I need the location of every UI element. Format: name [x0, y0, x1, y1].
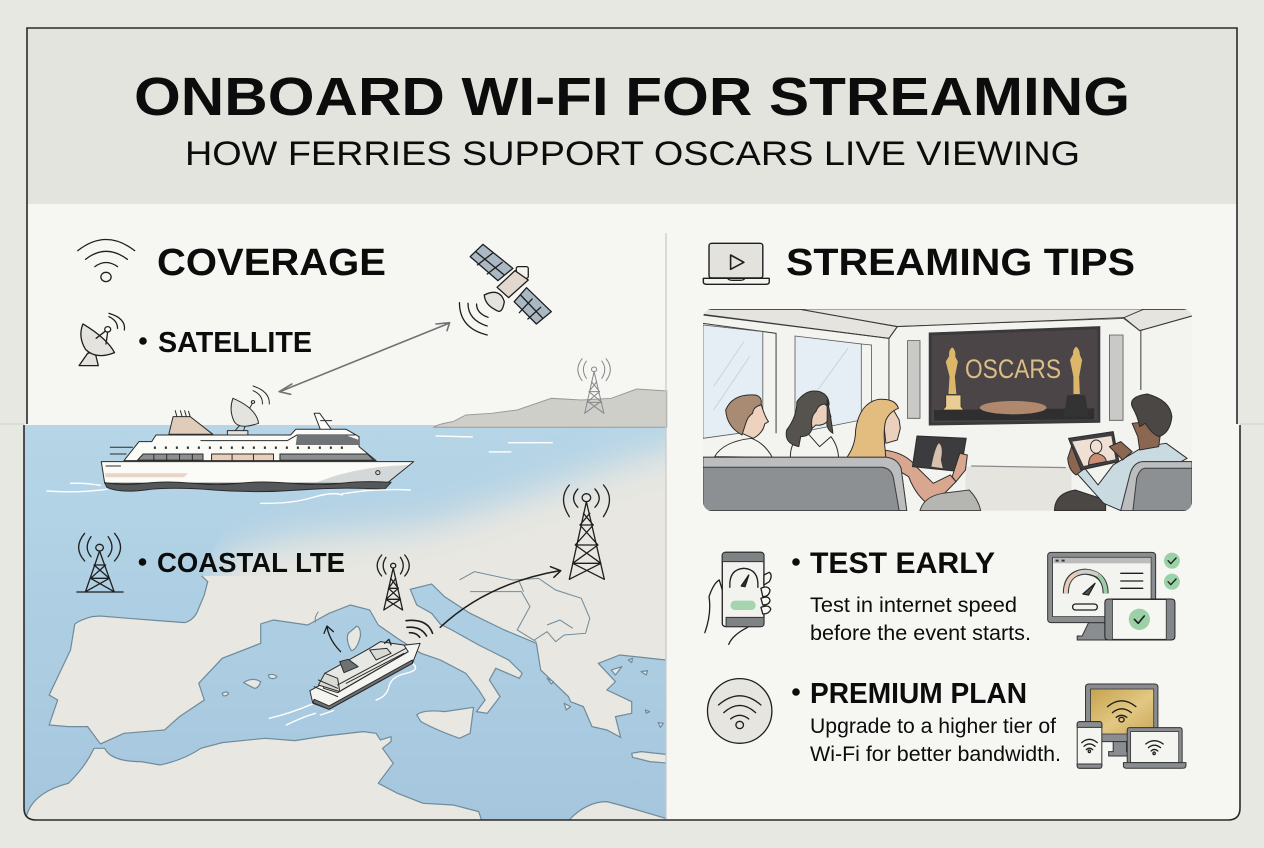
tip: premium plan: [708, 678, 1186, 768]
tip: premium plan: PREMIUM PLAN: [810, 678, 1027, 710]
solar panels: [470, 244, 551, 324]
satellite illustration: [459, 244, 551, 335]
text: test early detail: Test in internet speed: [810, 594, 1017, 617]
europe land soft fade: [204, 434, 666, 576]
divider between panels: [665, 233, 667, 820]
heading: coverage: [78, 239, 386, 284]
text: test early detail: [810, 594, 1031, 645]
text: premium plan detail: [810, 715, 1061, 766]
tablet: [912, 436, 966, 472]
seated man with tablet: [1054, 490, 1106, 511]
seated man: [715, 438, 772, 457]
icon: phone speed test: [705, 552, 771, 644]
map tower: small: [377, 555, 409, 610]
seat bench: [703, 457, 907, 511]
title: ONBOARD WI-FI FOR STREAMING: [134, 67, 1130, 127]
map tower: large: [564, 485, 609, 579]
balkan borders: [459, 572, 590, 642]
sicily: [417, 707, 474, 738]
greek islands: [547, 658, 671, 763]
corsica: [347, 626, 360, 651]
wall floor: [965, 467, 1072, 511]
speakers: [908, 341, 920, 418]
satellite item: SATELLITE: [158, 327, 312, 359]
arrow: ship to tower: [440, 567, 561, 627]
balearic islands: [222, 674, 277, 696]
heading: streaming tips: STREAMING TIPS: [786, 242, 1135, 284]
icon: lte tower: [77, 533, 123, 592]
screen text: oscars: OSCARS: [965, 354, 1061, 384]
statuette right: [1070, 347, 1082, 394]
ceiling: [703, 309, 1192, 338]
coast hill with tower: [434, 359, 667, 452]
arrow: small up: [324, 626, 341, 652]
icon: wifi circle: [708, 679, 772, 743]
north africa: [26, 732, 482, 822]
statuette left: [946, 347, 958, 394]
iberia and southern europe: [49, 576, 684, 744]
text: test early detail: before the event starts.: [810, 622, 1031, 645]
icon: gray tower: [578, 359, 610, 413]
tip: test early: TEST EARLY: [810, 547, 995, 580]
tip: test early: [705, 547, 1180, 645]
panel: coverage map: [24, 425, 666, 820]
coastal lte item: [77, 533, 345, 592]
ship: ferry at sea: [47, 386, 414, 503]
subtitle: HOW FERRIES SUPPORT OSCARS LIVE VIEWING: [185, 135, 1080, 173]
sea highlights: [436, 436, 552, 452]
text: premium plan detail: Upgrade to a higher tier of: [810, 715, 1056, 738]
libya coast: [569, 801, 666, 820]
icon: satellite dish: [79, 313, 125, 366]
text: premium plan detail: Wi-Fi for better bandwidth.: [810, 743, 1061, 766]
illustration: ferry lounge viewing: [703, 309, 1192, 511]
seated blonde woman with tablet: [886, 450, 956, 502]
seated woman: [790, 434, 839, 457]
windows: [703, 325, 763, 438]
icon: monitor and tablet check: [1048, 552, 1180, 640]
icon: laptop with play: [703, 243, 769, 284]
icon: devices with wifi: [1077, 684, 1186, 768]
screen: [930, 328, 1099, 424]
heading: coverage: COVERAGE: [157, 242, 386, 284]
satellite item: [79, 313, 312, 366]
ship: ferry on map: [269, 567, 561, 725]
coastal lte item: COASTAL LTE: [157, 547, 345, 578]
header band: [27, 28, 1237, 204]
arrow: ship to satellite link: [279, 323, 450, 394]
panel: body background: [24, 204, 1240, 820]
icon: wifi: [78, 239, 135, 282]
